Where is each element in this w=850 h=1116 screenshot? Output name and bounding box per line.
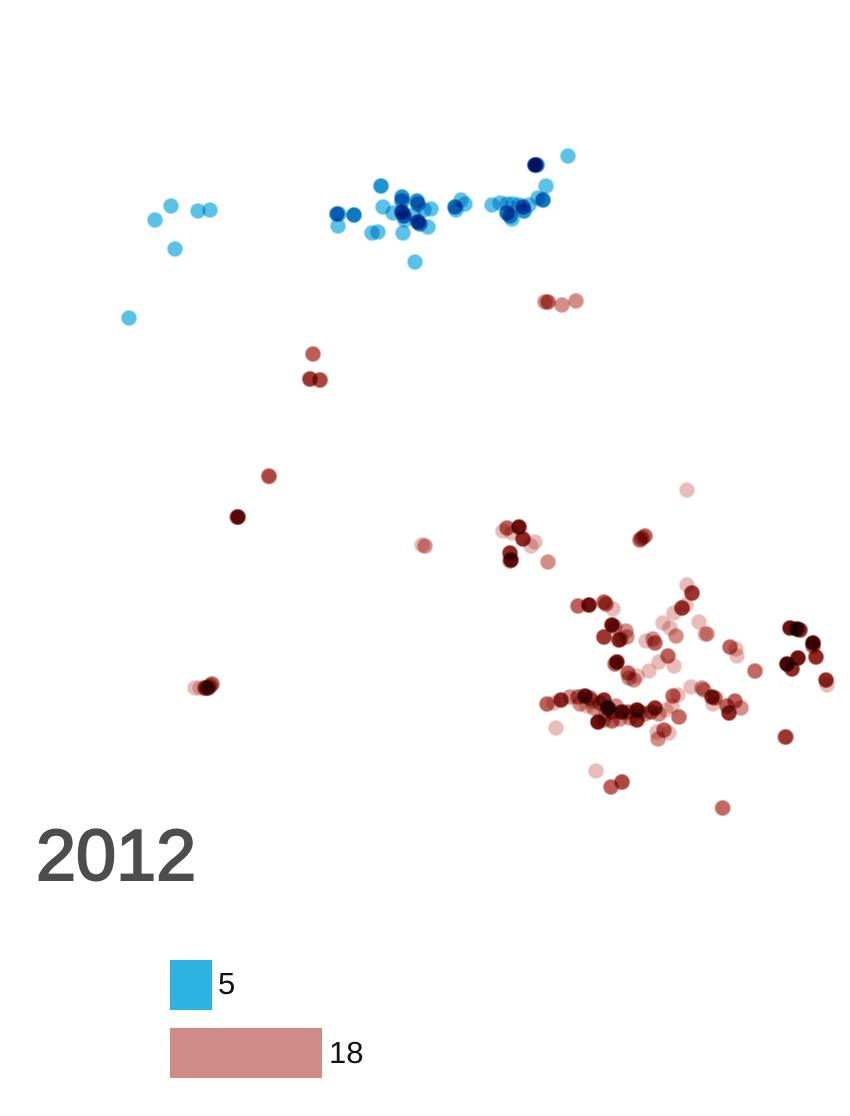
legend: red value: 18 — [329, 1035, 363, 1070]
red dots: north cluster — [302, 292, 584, 388]
red dots: far east cluster — [778, 620, 836, 694]
red dots: south-east upper cluster — [570, 576, 764, 688]
red dots: southern scatter — [588, 728, 794, 816]
legend: blue bar — [170, 960, 212, 1010]
red dots: west scatter — [186, 468, 278, 696]
year heading: 2012 — [36, 816, 196, 896]
red dots: south-east band — [538, 678, 750, 748]
blue dots: eastern cluster — [446, 148, 576, 228]
legend: red bar — [170, 1028, 322, 1078]
legend: blue value: 5 — [218, 966, 235, 1001]
blue dots: west scatter — [120, 198, 218, 326]
red dots: central cluster — [414, 482, 696, 570]
blue dots: central cluster — [328, 178, 440, 270]
